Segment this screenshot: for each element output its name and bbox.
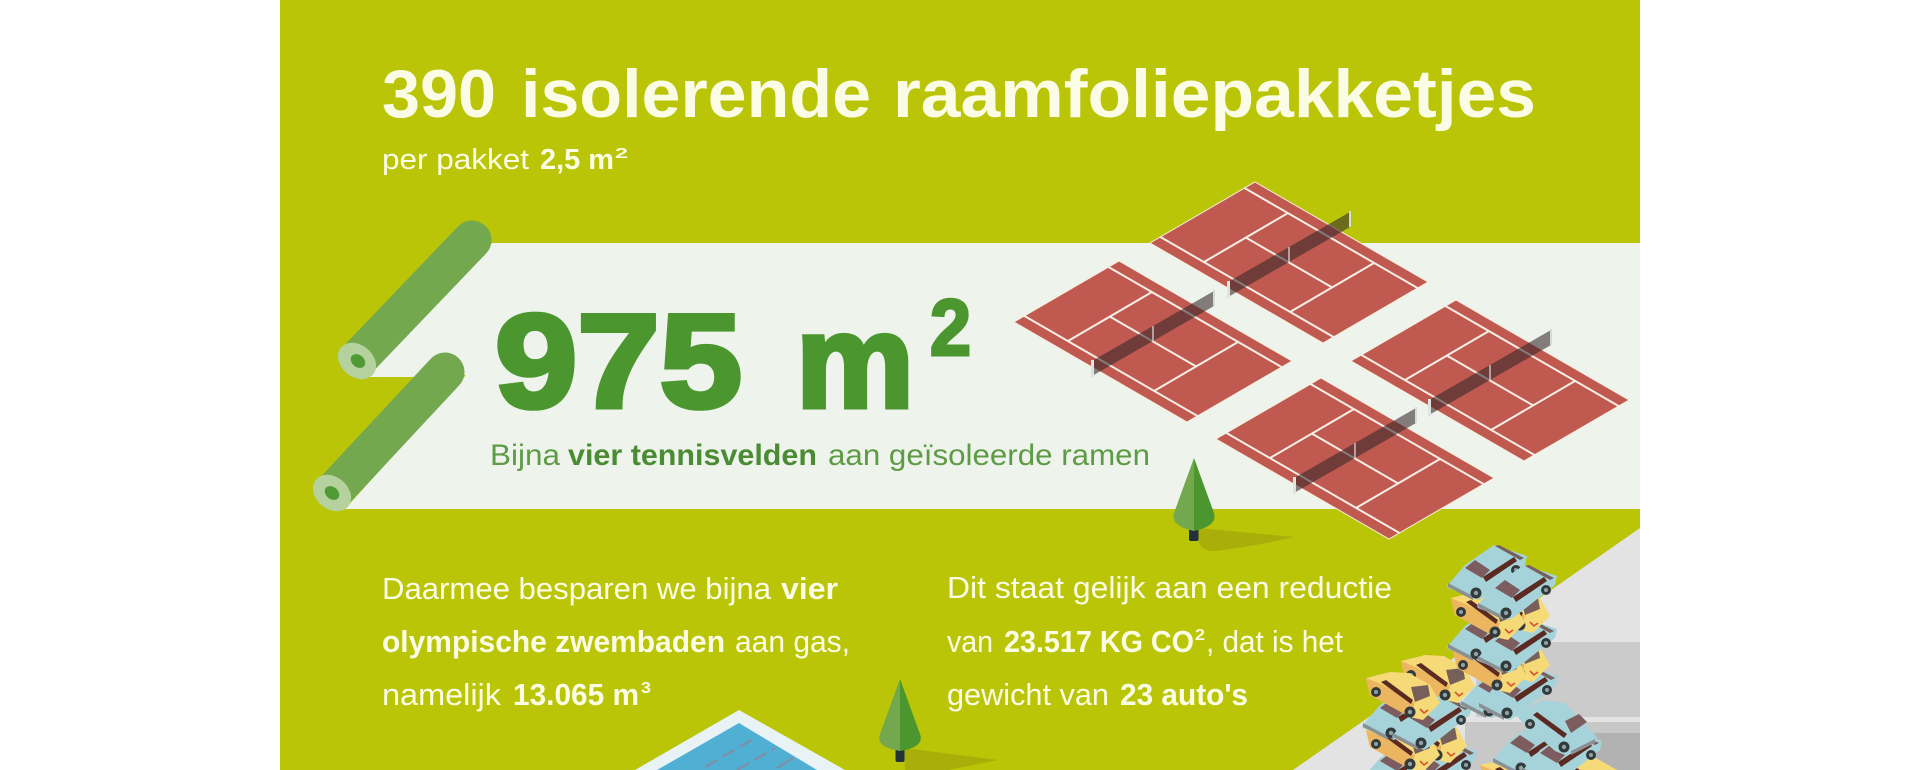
text block: gas savings: vier xyxy=(781,571,838,606)
text block: CO2 reduction: Dit staat gelijk aan een reductie xyxy=(947,570,1392,605)
big number: 975 m2 xyxy=(495,283,971,436)
subtitle: per pakket xyxy=(382,144,628,176)
title xyxy=(382,56,1536,132)
icon: tree beside pool xyxy=(879,679,998,770)
text block: CO2 reduction xyxy=(947,570,1392,712)
subtitle: per pakket: per pakket xyxy=(382,144,529,176)
illustration: tennis courts xyxy=(1014,182,1629,539)
big number: 975 m2: 2 xyxy=(930,283,971,372)
icon: tree beside courts xyxy=(1173,458,1294,551)
text block: gas savings: 13.065 m xyxy=(513,677,639,712)
caption: four tennis courts: Bijna xyxy=(490,439,560,472)
subtitle: per pakket: 2 xyxy=(615,145,628,162)
panel: unrolled window film band xyxy=(345,243,1640,509)
text block: gas savings: aan gas, xyxy=(735,624,850,659)
text block: gas savings: namelijk xyxy=(382,677,502,712)
text block: CO2 reduction: 2 xyxy=(1195,627,1205,644)
text block: CO2 reduction: gewicht van xyxy=(947,677,1109,712)
icon: upper film roll xyxy=(331,240,472,387)
title: isolerende xyxy=(521,56,871,132)
subtitle: per pakket: 2,5 m xyxy=(540,144,614,176)
text block: gas savings xyxy=(382,571,850,712)
text block: gas savings: olympische zwembaden xyxy=(382,624,725,659)
caption: four tennis courts: aan geïsoleerde ramen xyxy=(828,439,1150,472)
text block: gas savings: Daarmee besparen we bijna xyxy=(382,571,772,606)
title: 390 xyxy=(382,56,496,132)
icon: lower film roll xyxy=(306,372,445,519)
caption: four tennis courts xyxy=(490,439,1150,472)
panel: grey road xyxy=(1293,528,1640,770)
text block: CO2 reduction: , dat is het xyxy=(1206,624,1343,659)
text block: CO2 reduction: 23 auto's xyxy=(1120,677,1248,712)
big number: 975 m2: m xyxy=(796,288,914,436)
illustration: swimming pool xyxy=(635,710,845,770)
illustration: stacks of 23 cars xyxy=(1362,545,1627,770)
big number: 975 m2: 975 xyxy=(495,288,742,436)
text block: CO2 reduction: 23.517 KG CO xyxy=(1004,624,1194,659)
caption: four tennis courts: vier tennisvelden xyxy=(568,439,817,472)
text block: gas savings: 3 xyxy=(641,680,651,697)
panel: green background xyxy=(280,0,1640,770)
text block: CO2 reduction: van xyxy=(947,624,993,659)
title: raamfoliepakketjes xyxy=(893,56,1536,132)
